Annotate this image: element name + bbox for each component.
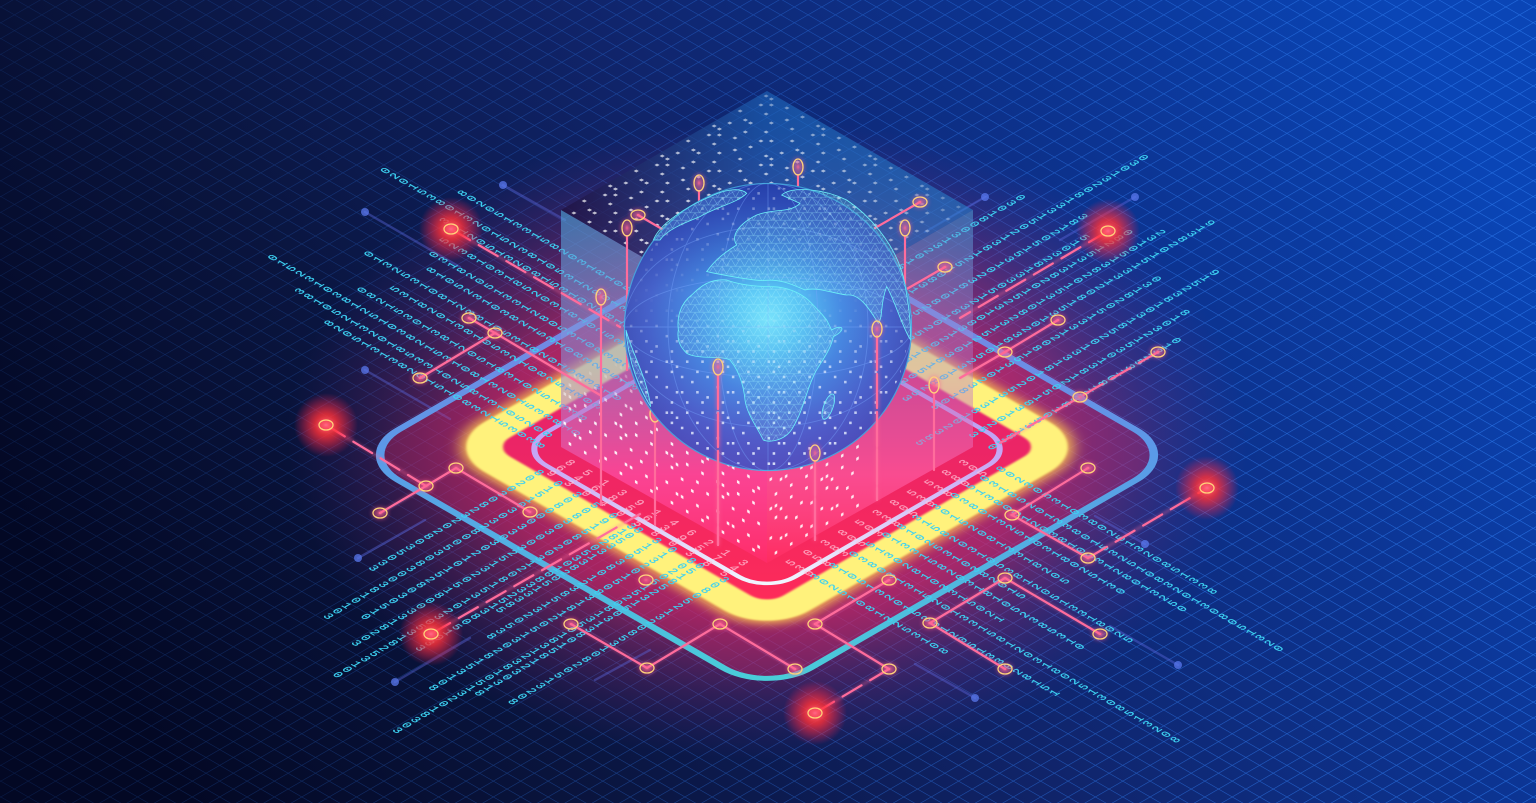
binary digit rows: lower left: 308000330302101528030510 — [356, 489, 587, 622]
binary digit rows: lower right: 038031315201331581203180251308513208 — [844, 548, 1185, 746]
left strip — [542, 457, 754, 579]
cube left face dots — [564, 363, 760, 552]
cube top face dots — [572, 94, 961, 254]
circuit traces with nodes — [294, 159, 1239, 745]
cube right face — [767, 210, 973, 563]
binary digit rows: upper right: 013253108123810531820 — [983, 335, 1187, 453]
binary digit rows: lower right: 81025310382015 — [891, 521, 1031, 601]
binary digit rows: lower left: 508303003251320518003318203 — [346, 499, 605, 649]
cube left face — [561, 210, 767, 563]
left strip: 869 — [542, 457, 580, 479]
left strip: 160 — [576, 477, 615, 499]
right strip: 338 — [867, 507, 906, 529]
binary digit rows: upper right: 0318205133120815310238105 — [926, 273, 1167, 412]
left strip: 345 — [715, 557, 754, 579]
trace glow — [326, 229, 1207, 713]
outer ring — [355, 217, 1179, 693]
pins in front of the globe — [713, 321, 882, 545]
left strip: 384 — [594, 487, 632, 509]
yellow ring glow — [467, 274, 1067, 620]
binary digit rows: lower left: 0518523150313801581230318 — [470, 560, 710, 699]
cube right face dots — [769, 444, 859, 555]
right strip: 530 — [902, 487, 940, 509]
binary digit rows: upper left: 0152310381251038215310813201533810 — [263, 252, 586, 438]
binary digit rows: lower right: 0380132510318025130 — [945, 490, 1131, 597]
right strip: 383 — [815, 537, 854, 559]
left strip: 950 — [611, 497, 650, 519]
right strip: 880 — [936, 467, 975, 489]
red glow nodes — [294, 197, 1239, 745]
land tint — [626, 190, 911, 441]
left strip: 438 — [645, 517, 684, 539]
binary digit rows: lower right: 302510813253108 — [805, 571, 954, 657]
chip platform rings — [355, 217, 1179, 693]
dim background circuit traces — [354, 181, 1182, 702]
inner lilac ring — [518, 305, 1016, 593]
binary digit rows: lower left: 013201508318120513028153108 — [423, 544, 683, 693]
translucent cube — [561, 91, 973, 563]
front pin lines — [718, 336, 877, 545]
cube top face — [561, 91, 973, 329]
right strip: 805 — [832, 527, 871, 549]
binary digit rows: upper left — [215, 154, 737, 455]
binary digit rows: upper right — [749, 136, 1329, 471]
binary digit rows: upper right: 9138201513312081531023810523108253 — [897, 217, 1220, 404]
binary digit rows: lower left: 802051520813501831238105132018303 — [387, 555, 702, 736]
binary digit rows: lower right: 802305310380251320851338 — [991, 463, 1222, 597]
binary digit rows: upper left: 5238103185203181025313810 — [434, 235, 675, 374]
binary digit rows: upper left: 38120513208153102381052310 — [434, 215, 684, 359]
binary digit rows: upper right: 810321530138120518310253 — [964, 307, 1195, 440]
right strip: 538 — [919, 477, 958, 499]
binary digit rows: lower right — [805, 463, 1333, 768]
binary digit rows: lower left: 0915802031208153102305318253100 — [328, 510, 624, 681]
solid traces — [380, 202, 1100, 669]
globe graticule — [624, 183, 912, 471]
globe — [624, 183, 912, 471]
binary digit rows: lower left: 8053313820513385 — [491, 524, 649, 616]
left strip: 178 — [697, 547, 736, 569]
binary digit rows: upper right: 5103281330512381025310838 — [854, 232, 1095, 371]
vertical pins — [601, 175, 934, 545]
right strip: 503 — [850, 517, 889, 539]
binary digit rows: upper right: 030132081331502138125108310238501820 — [812, 152, 1154, 349]
left strip: 253 — [680, 537, 719, 559]
globe sphere — [624, 183, 912, 471]
right strip: 805 — [884, 497, 923, 519]
binary digit rows: upper right: 915238103185201331810253138102385 — [910, 267, 1225, 448]
binary digit rows: upper right: 0821531382015231083120518330 — [870, 227, 1138, 382]
front pin node right — [872, 321, 882, 337]
binary digit rows: upper left: 820513138201510832153038 — [319, 317, 550, 451]
binary digit rows: upper left: 81052310382153108320513 — [421, 264, 643, 393]
binary digit rows: lower left: 01510303280053083003810103 — [318, 478, 568, 622]
binary digit rows: upper left: 0318205133128053108382105 — [424, 249, 664, 388]
pink inner plate — [481, 282, 1053, 612]
binary digit rows: lower right: 301520813318205 — [926, 501, 1075, 587]
right strip: 058 — [798, 547, 837, 569]
continents — [626, 190, 911, 441]
binary digit rows: upper left: 0821530138120518310251338 — [352, 284, 593, 423]
right strip — [780, 457, 992, 579]
binary digit rows: upper left: 53182013810532108251303 — [385, 283, 607, 412]
binary digit rows: lower left: 3150380123851320538 — [481, 535, 667, 642]
left strip: 543 — [559, 467, 598, 489]
binary digit rows: lower left — [235, 467, 735, 755]
binary digit rows: upper right: 03018003132015338120518303 — [781, 192, 1031, 336]
front pin node bottom — [810, 445, 820, 461]
right strip: 305 — [954, 457, 992, 479]
binary digit rows: lower right: 8105132015381205133028151 — [824, 560, 1064, 699]
binary digit rows: upper right: 231051382015310823152103815032 — [884, 227, 1171, 392]
binary digit rows: upper right: 381205153102381082513201338 — [834, 211, 1093, 360]
binary digit rows: lower right: 513805120381053128013250 — [961, 481, 1192, 614]
dashed traces — [326, 229, 1207, 713]
binary digit rows: lower left: 8020308232028035033 — [364, 467, 549, 574]
node rings — [319, 159, 1214, 718]
globe dots — [628, 187, 908, 467]
central red glow — [287, 120, 1247, 760]
right strip: 530 — [780, 557, 819, 579]
binary digit rows: lower right: 031852013380153251083201308051320 — [974, 473, 1289, 654]
globe rim — [624, 184, 912, 470]
binary digit rows: upper left: 0132531081238105318201533810 — [359, 248, 627, 403]
globe shading — [624, 183, 912, 471]
binary digit rows: upper left: 02015380132015238105312801331520810 — [375, 165, 708, 357]
binary digit rows: upper left: 3810521320185331025813105208 — [289, 285, 558, 440]
land mesh and coastlines — [626, 190, 911, 441]
binary digit rows: lower right: 0133158203181052385310 — [877, 529, 1090, 652]
binary digit rows: lower right: 315820310538120513318025 — [907, 512, 1138, 645]
left strip: 690 — [663, 527, 702, 549]
binary digit rows: lower right: 513028103315021 — [860, 539, 1009, 625]
front pin node left — [713, 359, 723, 375]
binary digit rows: lower left: 308052132085310820513208 — [503, 574, 735, 707]
pink digits around the cube base — [542, 457, 992, 579]
binary digit rows: lower left: 318205301083325138051033 — [410, 520, 642, 654]
binary digit rows: upper left: 80205133158203181052385310320 — [452, 187, 730, 347]
left strip: 165 — [628, 507, 667, 529]
yellow ring — [467, 274, 1067, 620]
